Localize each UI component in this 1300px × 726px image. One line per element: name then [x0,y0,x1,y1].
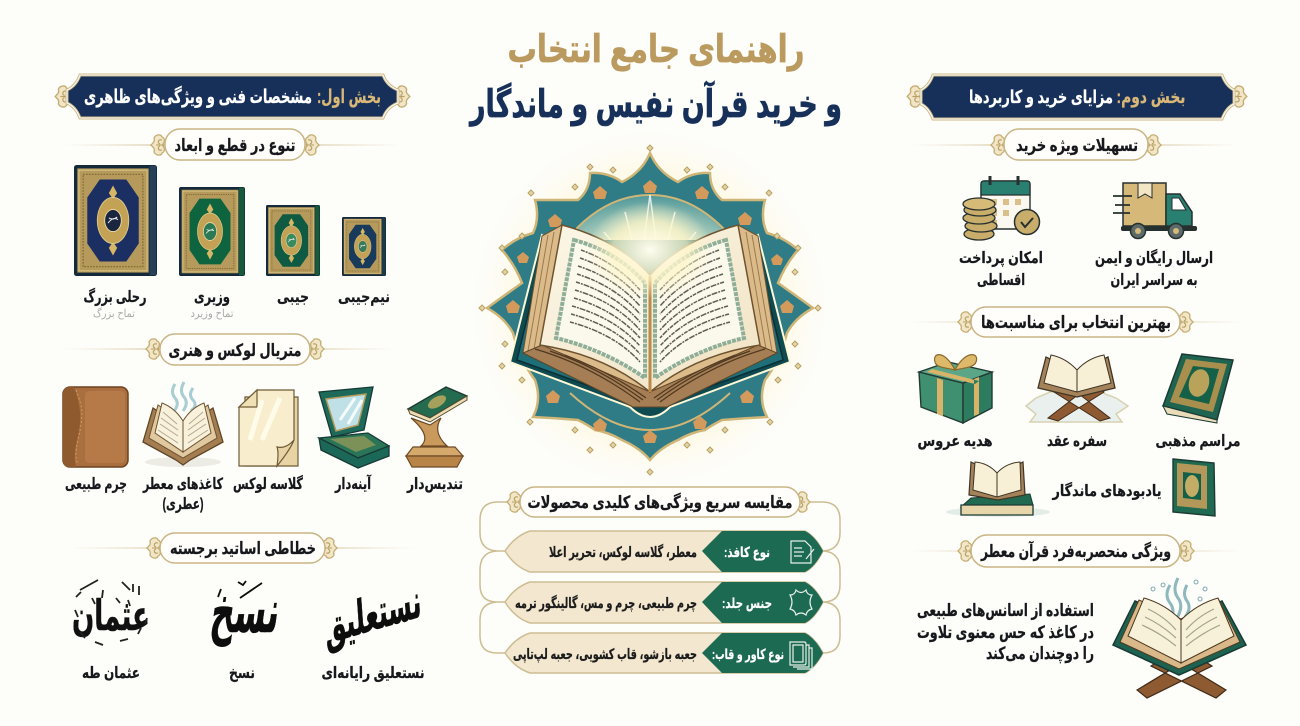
heading: occasions: بهترین انتخاب برای مناسبت‌ها [981,313,1171,333]
heading: materials: متریال لوکس و هنری [168,341,302,361]
heading: sizes: تنوع در قطع و ابعاد [174,136,296,156]
calligraphy: naskh: نسخ [229,665,255,682]
icon: leather hide [790,590,812,615]
section one banner: مشخصات فنی و ویژگی‌های ظاهری [84,85,312,108]
row: box and cover type [505,633,823,673]
heading: purchase facilities [912,129,1238,160]
icon: delivery truck: ارسال رایگان و ایمن [1095,248,1213,267]
title line 1: راهنمای جامع انتخاب [508,29,804,71]
row: cover material: چرم طبیعی، چرم و مس، گالینگور ترمه [515,594,697,612]
icon: delivery truck: به سراسر ایران [1110,272,1198,289]
icon: scented paper book: (عطری) [162,496,204,513]
book: large rahli [74,165,157,320]
icon: green standing book [1173,459,1215,516]
heading: materials [64,334,395,365]
subsection: occasions [910,307,1245,517]
book: half pocket [338,217,390,306]
icon: religious ceremony book: مراسم مذهبی [1156,433,1240,450]
icon: bridal gift box: هدیه عروس [918,433,992,450]
heading: occasions [910,307,1245,337]
title [469,29,842,127]
icon: document [791,541,814,563]
icon: mirrored box: آینه‌دار [334,474,371,493]
open book [510,202,790,417]
heading: calligraphy: خطاطی اساتید برجسته [170,539,316,559]
subsection: materials [63,334,467,513]
calligraphy: nastaliq: نستعلیق رایانه‌ای [322,665,424,682]
calligraphy: othman taha [72,580,150,682]
calligraphy: naskh: نسخ [207,577,285,647]
heading: scented Quran [912,535,1240,567]
icon: carved stand [406,387,467,493]
heading: calligraphy [70,533,415,563]
panel: section one (left column) [55,75,467,682]
memorial gifts row [946,459,1215,517]
subsection: calligraphy [70,533,424,682]
icon: glossy paper [233,390,304,493]
icon: scented book on stand [1113,578,1246,698]
connector frame [480,502,840,653]
row: paper type [505,531,823,572]
icon: calendar and coins: اقساطی [977,272,1025,289]
row: cover material: جنس جلد: [722,595,772,611]
icon: calendar and coins: امکان پرداخت [959,250,1043,268]
row: cover material [505,582,823,623]
subsection: purchase facilities [912,129,1238,289]
panel: section two (right column) [907,75,1247,698]
section one banner: بخش اول: [317,87,381,108]
calligraphy: othman taha: عثمان [72,592,150,639]
icon: box stack [790,642,812,669]
icon: mirrored box [319,387,389,493]
heading: sizes [64,129,403,160]
text: scent description [917,601,1094,664]
text: scent description: را دوچندان می‌کند [986,644,1094,664]
calligraphy: naskh [207,577,285,682]
book: vaziri: وزیری [194,289,230,306]
book: pocket: جیبی [277,289,309,306]
book: vaziri: تماح وزیرد [190,308,234,320]
rosette medallion [479,145,821,475]
book: large rahli: رحلی بزرگ [84,288,146,306]
row: box and cover type: جعبه بازشو، قاب کشویی، جعبه لپ‌تاپی [513,647,697,663]
text: scent description: در کاغذ که حس معنوی تلاوت [917,623,1094,643]
heading: purchase facilities: تسهیلات ویژه خرید [1016,136,1138,156]
icon: natural leather [63,387,128,494]
row: paper type: نوع کافذ: [724,544,770,561]
central illustration: open Quran on rosette [460,118,840,498]
label: memorials: یادبودهای ماندگار [1052,481,1162,500]
row: paper type: معطر، گلاسه لوکس، تحریر اعلا [549,543,697,561]
icon: natural leather: چرم طبیعی [65,476,127,494]
book: pocket [266,205,320,306]
panel: quick comparison table [480,487,840,673]
book: half pocket: نیم‌جیبی [338,289,390,306]
heading: comparison: مقایسه سریع ویژگی‌های کلیدی محصولات [528,492,792,513]
text: scent description: استفاده از اسانس‌های طبیعی [917,601,1094,620]
book: vaziri [179,187,245,320]
heading: scented Quran: ویژگی منحصربه‌فرد قرآن معطر [980,540,1171,562]
calligraphy: nastaliq [322,574,424,682]
icon: bridal gift box [918,355,992,450]
row: box and cover type: نوع کاور و قاب: [712,646,784,663]
subsection: scented Quran [912,535,1246,698]
section two banner: بخش دوم: [1116,87,1186,108]
icon: book on book [946,462,1050,517]
calligraphy: nastaliq: نستعلیق [323,574,423,655]
icon: scented paper book: کاغذهای معطر [142,476,224,493]
subsection: sizes [64,129,403,320]
icon: wedding spread rehal: سفره عقد [1047,433,1107,450]
section two banner [907,75,1247,119]
section one banner [55,75,410,118]
icon: delivery truck [1095,183,1213,289]
book: large rahli: تماح بزرگ [93,307,135,320]
section two banner: مزایای خرید و کاربردها [969,87,1113,108]
icon: calendar and coins [959,176,1043,289]
icon: scented paper book [142,382,224,513]
icon: religious ceremony book [1156,354,1240,450]
glow halo [460,118,840,498]
icon: carved stand: تندیس‌دار [406,476,463,493]
icon: glossy paper: گلاسه لوکس [233,474,304,493]
title line 2: و خرید قرآن نفیس و ماندگار [469,80,842,127]
heading: comparison [507,487,810,517]
icon: wedding spread rehal [1026,355,1128,450]
calligraphy: othman taha: عثمان طه [82,665,140,682]
